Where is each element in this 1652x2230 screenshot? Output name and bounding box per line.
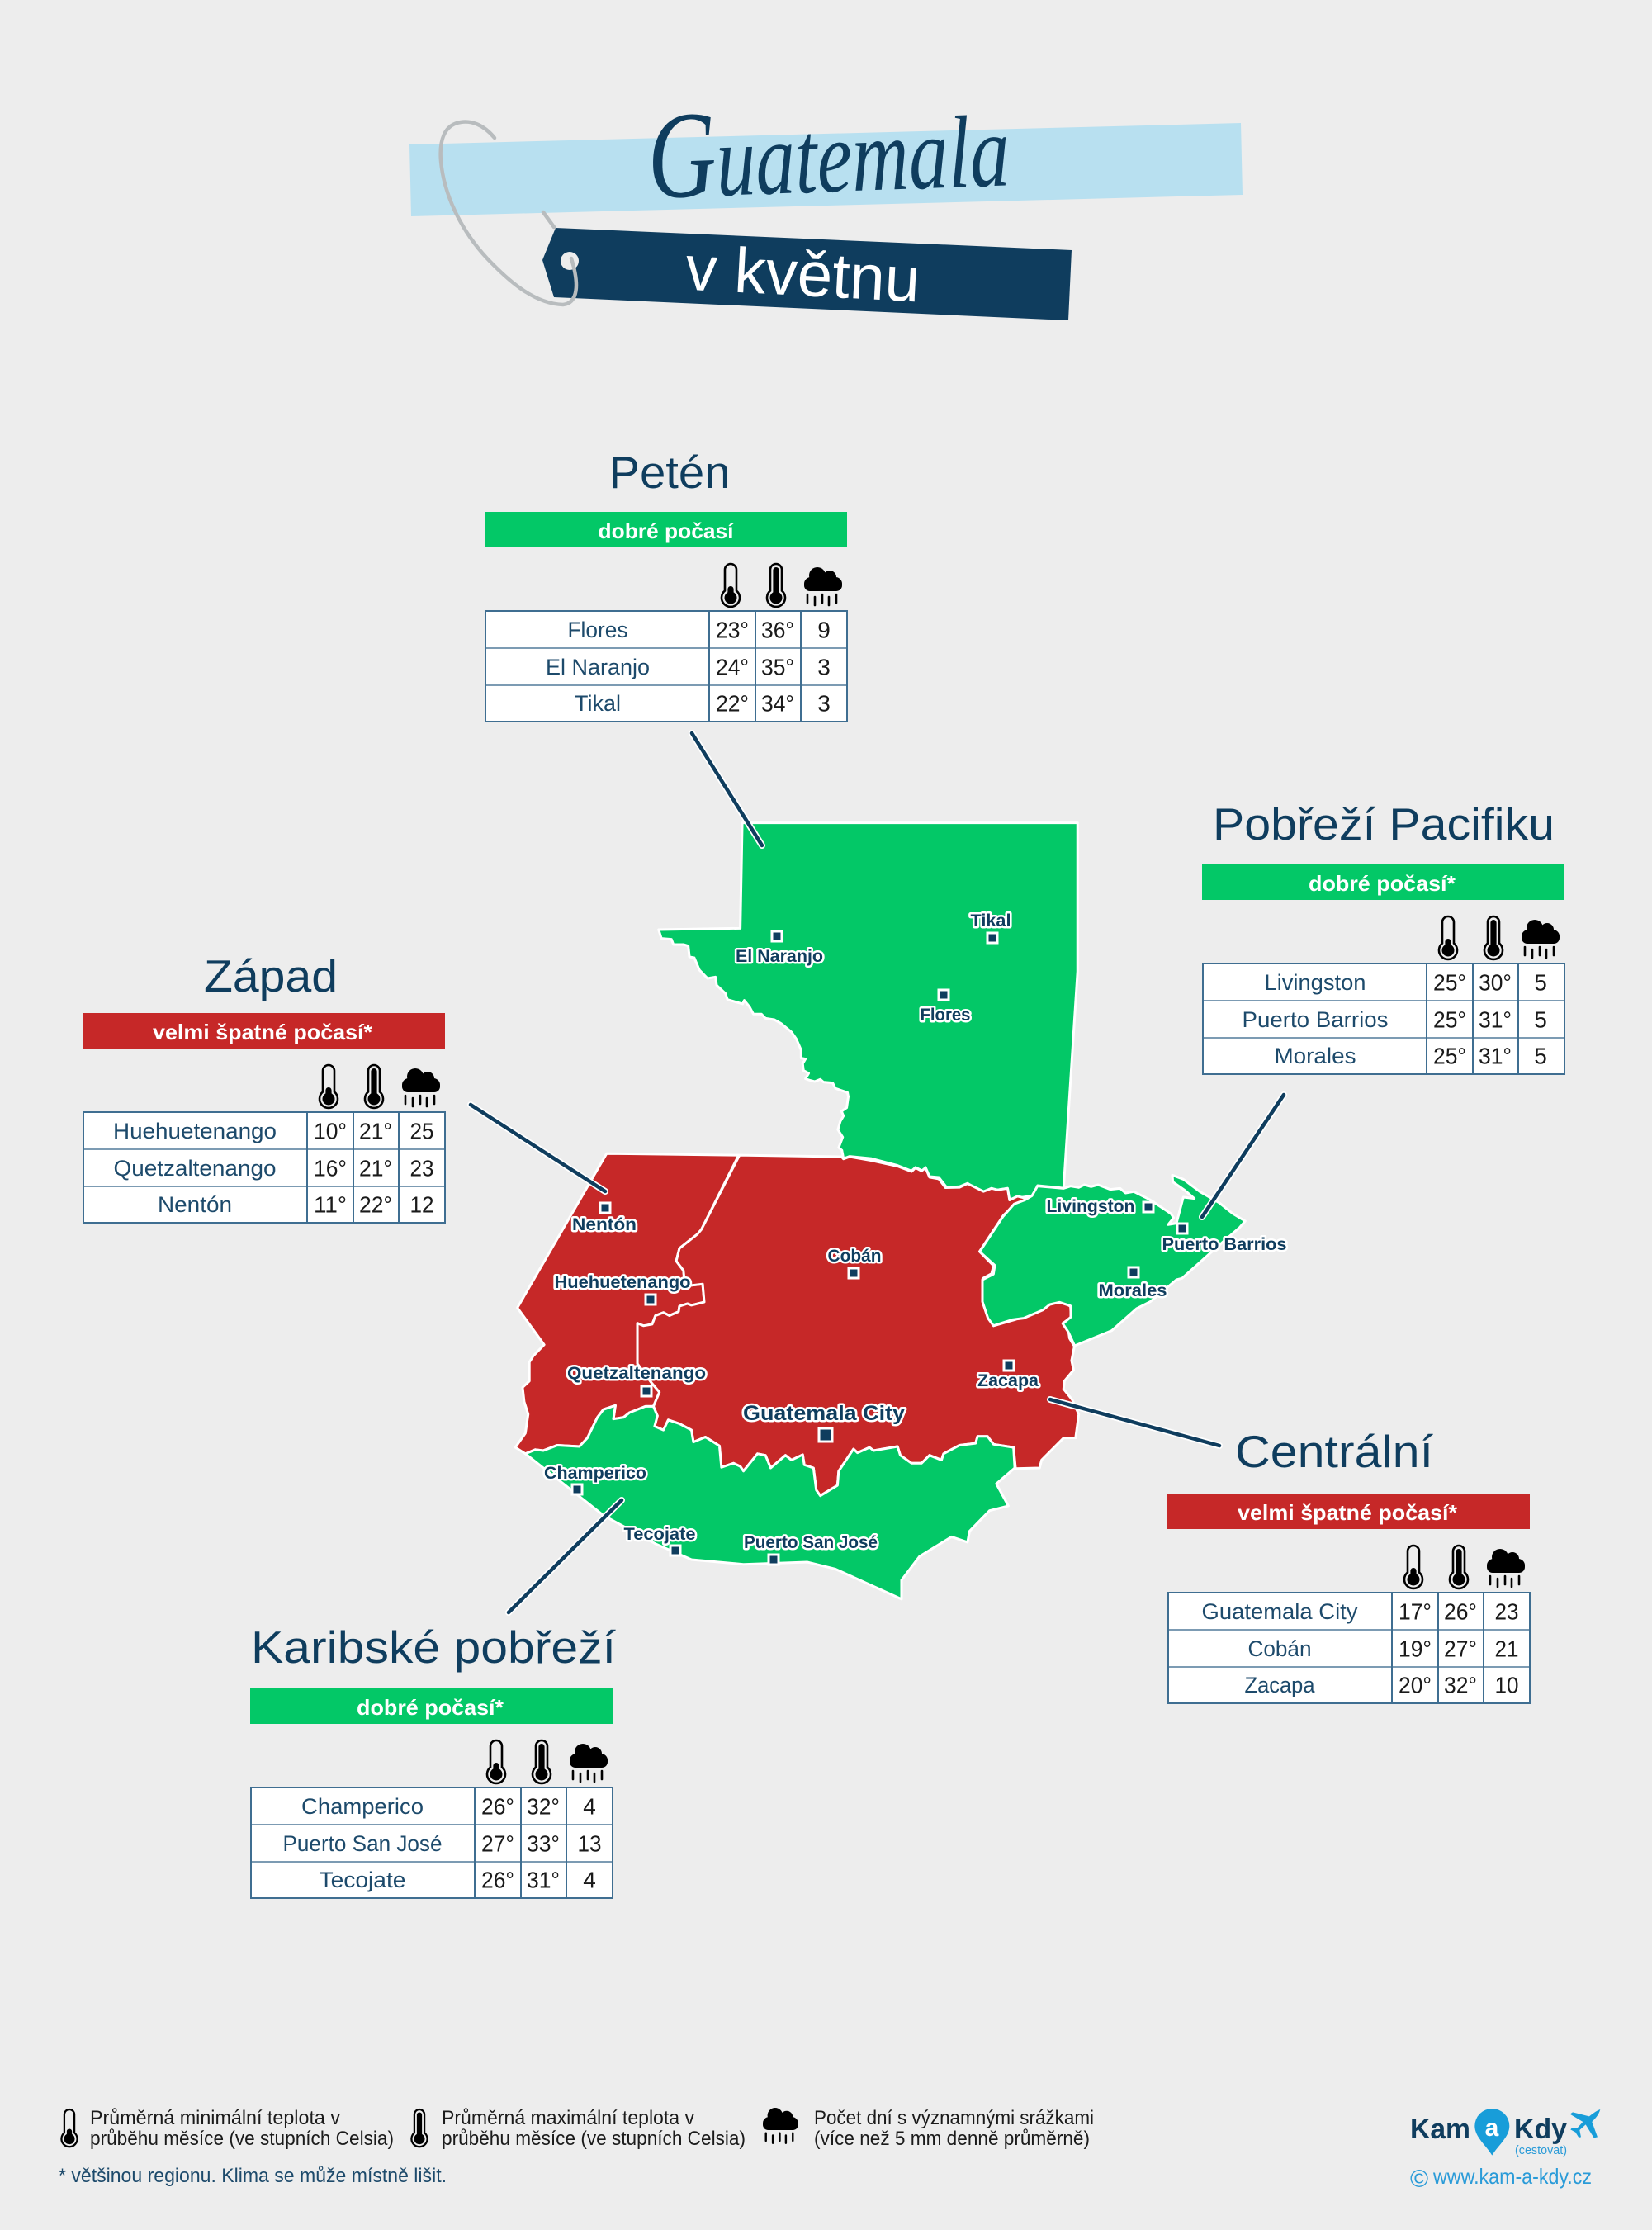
climate table: 27°: [1444, 1636, 1477, 1661]
marker: Zacapa: [1004, 1361, 1014, 1371]
marker: Tecojate: [670, 1546, 680, 1555]
climate table: Morales: [1275, 1044, 1356, 1068]
climate table: 10: [1494, 1673, 1519, 1697]
leader line: Západ: [471, 1105, 605, 1191]
climate table: Nentón: [158, 1192, 232, 1217]
climate table: 35°: [761, 654, 794, 680]
label: Flores: Flores: [920, 1006, 971, 1025]
climate table: 5: [1534, 1007, 1547, 1032]
climate table: [251, 1787, 613, 1898]
logo text: Kdy: Kdy: [1514, 2114, 1567, 2145]
logo: Kam a Kdy: [1410, 2109, 1600, 2193]
leader line: Pobřeží Pacifiku: [1202, 1095, 1284, 1217]
region: Pobřeží Pacifiku: [980, 1175, 1245, 1346]
status bar: dobré počasí: [485, 512, 847, 547]
label: Quetzaltenango: Quetzaltenango: [567, 1364, 706, 1383]
climate table: El Naranjo: [546, 655, 650, 679]
climate table: Cobán: [1248, 1636, 1311, 1661]
icon: legend rain cloud: [763, 2108, 798, 2143]
icon: maximum temperature: [767, 564, 785, 607]
climate table: 4: [583, 1793, 596, 1820]
tag string loop: [441, 122, 576, 305]
climate table: 25°: [1433, 969, 1466, 996]
climate table: 23°: [716, 618, 749, 642]
subtitle: v květnu: v květnu: [684, 233, 921, 315]
climate table: 21°: [359, 1156, 392, 1181]
climate table: 5: [1534, 1044, 1547, 1068]
climate table: Quetzaltenango: [114, 1156, 276, 1181]
climate table: 19°: [1399, 1636, 1432, 1661]
label: Huehuetenango: Huehuetenango: [555, 1273, 690, 1292]
heading: Centrální: Centrální: [1235, 1426, 1434, 1477]
status text: dobré počasí*: [357, 1695, 504, 1720]
icon: legend maximum temperature: [411, 2109, 428, 2147]
marker: Cobán: [849, 1268, 859, 1278]
status bar: dobré počasí: [250, 1688, 613, 1724]
climate table: [83, 1112, 445, 1223]
marker: Morales: [1129, 1267, 1138, 1277]
climate table: Flores: [568, 618, 627, 642]
climate table: 31°: [1479, 1007, 1512, 1032]
icon: rain cloud: [1487, 1549, 1525, 1587]
status text: velmi špatné počasí*: [153, 1020, 373, 1044]
climate table: [1168, 1593, 1530, 1703]
climate table: 26°: [481, 1793, 514, 1820]
marker: Puerto Barrios: [1177, 1224, 1187, 1233]
climate table: Champerico: [301, 1794, 424, 1819]
label: El Naranjo: El Naranjo: [736, 947, 823, 966]
climate table: Zacapa: [1245, 1673, 1315, 1697]
website: www.kam-a-kdy.cz: [1432, 2164, 1592, 2189]
icon: minimum temperature: [722, 564, 740, 607]
label: Puerto San José: Puerto San José: [744, 1533, 878, 1552]
title: Guatemala: Guatemala: [645, 75, 1011, 225]
marker: Puerto San José: [769, 1555, 779, 1565]
legend text: rain days: (více než 5 mm denně průměrně): [814, 2128, 1090, 2150]
icon: minimum temperature: [1404, 1546, 1422, 1588]
climate table: 9: [817, 618, 831, 642]
climate table: 4: [583, 1868, 596, 1892]
climate table: 25°: [1433, 1007, 1466, 1032]
label: Tikal: Tikal: [971, 911, 1011, 930]
heading: Karibské pobřeží: Karibské pobřeží: [251, 1622, 617, 1673]
icon: minimum temperature: [320, 1065, 338, 1108]
climate table: 16°: [314, 1156, 347, 1181]
label: Cobán: Cobán: [827, 1247, 882, 1266]
heading: Petén: Petén: [609, 447, 730, 498]
climate table: 25: [409, 1118, 434, 1144]
subtitle tag: navy: [542, 228, 1072, 320]
climate table: 13: [578, 1831, 601, 1856]
panel: Petén: [485, 447, 847, 722]
legend text: maximum temperature: průběhu měsíce (ve stupních Celsia): [442, 2128, 746, 2150]
legend text: minimum temperature: průběhu měsíce (ve stupních Celsia): [90, 2128, 394, 2150]
map of Guatemala: [515, 823, 1245, 1599]
climate table: 12: [409, 1192, 434, 1217]
climate table: 21: [1494, 1636, 1519, 1661]
leader line: Centrální: [1050, 1399, 1219, 1446]
climate table: 23: [1494, 1598, 1519, 1625]
marker: El Naranjo: [772, 931, 782, 941]
label: Guatemala City: Guatemala City: [743, 1402, 905, 1425]
logo text: Kam: Kam: [1410, 2114, 1470, 2145]
icon: maximum temperature: [365, 1065, 383, 1108]
logo pin letter: a: [1485, 2114, 1499, 2142]
panel: Západ: [83, 950, 445, 1223]
icon: legend minimum temperature: [61, 2109, 78, 2147]
climate table: 24°: [716, 654, 749, 680]
climate table: 17°: [1399, 1598, 1432, 1625]
climate table: 33°: [527, 1831, 560, 1856]
label: Morales: Morales: [1098, 1281, 1167, 1300]
climate table: 20°: [1399, 1673, 1432, 1697]
legend text: minimum temperature: Průměrná minimální teplota v: [90, 2107, 340, 2129]
marker: Champerico: [572, 1484, 582, 1494]
climate table: 3: [817, 690, 831, 717]
legend text: rain days: Počet dní s významnými srážkami: [814, 2107, 1094, 2129]
climate table: 10°: [314, 1118, 347, 1144]
icon: maximum temperature: [533, 1740, 551, 1783]
climate table: 3: [817, 654, 831, 680]
leader line: Karibské pobřeží: [509, 1500, 622, 1612]
copyright sign: ©: [1410, 2166, 1428, 2193]
icon: rain cloud: [570, 1744, 608, 1782]
label: Champerico: Champerico: [544, 1464, 646, 1483]
panel: Pobřeží Pacifiku: [1202, 798, 1564, 1074]
logo plane: [1570, 2109, 1600, 2138]
logo pin: [1474, 2109, 1509, 2156]
icon: rain cloud: [1522, 920, 1560, 958]
climate table: 22°: [359, 1192, 392, 1217]
climate table: 5: [1534, 969, 1547, 996]
status bar: velmi špatné počasí: [1167, 1494, 1530, 1529]
marker: Quetzaltenango: [641, 1386, 651, 1396]
climate table: [1203, 963, 1564, 1074]
status text: velmi špatné počasí*: [1238, 1500, 1458, 1525]
icon: minimum temperature: [487, 1740, 505, 1783]
climate table: 22°: [716, 690, 749, 717]
label: Zacapa: Zacapa: [977, 1371, 1039, 1390]
climate table: 30°: [1479, 969, 1512, 996]
climate table: 32°: [527, 1793, 560, 1820]
marker: Tikal: [987, 933, 997, 943]
climate table: 27°: [481, 1831, 514, 1856]
marker: Nentón: [600, 1203, 610, 1213]
tag hole: [561, 252, 579, 270]
marker: Flores: [939, 990, 949, 1000]
leader line: Petén: [692, 733, 762, 845]
panel: Centrální: [1167, 1426, 1530, 1703]
label: Nentón: Nentón: [572, 1215, 637, 1234]
status text: dobré počasí: [598, 518, 734, 543]
region: Západ: [515, 1153, 739, 1454]
climate table: 36°: [761, 618, 794, 642]
city markers and labels: [544, 911, 1286, 1565]
title banner: light blue: [409, 123, 1243, 216]
label: Puerto Barrios: Puerto Barrios: [1162, 1235, 1286, 1254]
footnote: * většinou regionu. Klima se může místně lišit.: [59, 2165, 447, 2187]
climate table: Tikal: [575, 691, 621, 716]
status text: dobré počasí*: [1309, 871, 1456, 896]
heading: Západ: Západ: [204, 950, 338, 1001]
climate table: 34°: [761, 690, 794, 717]
status bar: velmi špatné počasí: [83, 1013, 445, 1049]
climate table: Puerto Barrios: [1242, 1007, 1389, 1032]
climate table: 26°: [1444, 1598, 1477, 1625]
climate table: 21°: [359, 1118, 392, 1144]
region: Centrální: [637, 1155, 1079, 1496]
climate table: 26°: [481, 1868, 514, 1892]
climate table: 23: [409, 1156, 434, 1181]
climate table: 31°: [1479, 1044, 1512, 1068]
climate table: Puerto San José: [282, 1831, 443, 1856]
climate table: 32°: [1444, 1673, 1477, 1697]
climate table: Guatemala City: [1202, 1599, 1358, 1624]
climate table: [485, 611, 847, 722]
status bar: dobré počasí: [1202, 864, 1564, 900]
label: Tecojate: Tecojate: [624, 1525, 695, 1544]
marker: Livingston: [1143, 1202, 1153, 1212]
region: Petén: [659, 823, 1077, 1200]
marker: Guatemala City: [819, 1428, 832, 1442]
climate table: Livingston: [1265, 970, 1366, 995]
climate table: Huehuetenango: [113, 1119, 277, 1143]
climate table: Tecojate: [319, 1868, 406, 1892]
marker: Huehuetenango: [646, 1295, 656, 1304]
icon: maximum temperature: [1450, 1546, 1468, 1588]
icon: rain cloud: [402, 1068, 440, 1106]
climate table: 31°: [527, 1868, 560, 1892]
heading: Pobřeží Pacifiku: Pobřeží Pacifiku: [1213, 798, 1555, 850]
region: Karibské pobřeží: [525, 1405, 1015, 1599]
legend: [59, 2107, 1094, 2187]
logo text: cestovat: (cestovat): [1515, 2143, 1567, 2157]
legend text: maximum temperature: Průměrná maximální teplota v: [442, 2107, 694, 2129]
label: Livingston: Livingston: [1047, 1197, 1134, 1216]
icon: rain cloud: [804, 567, 842, 605]
icon: maximum temperature: [1484, 916, 1503, 959]
panel: Karibské pobřeží: [250, 1622, 617, 1898]
climate table: 11°: [314, 1192, 347, 1217]
climate table: 25°: [1433, 1044, 1466, 1068]
title tag: [409, 75, 1243, 320]
icon: minimum temperature: [1439, 916, 1457, 959]
